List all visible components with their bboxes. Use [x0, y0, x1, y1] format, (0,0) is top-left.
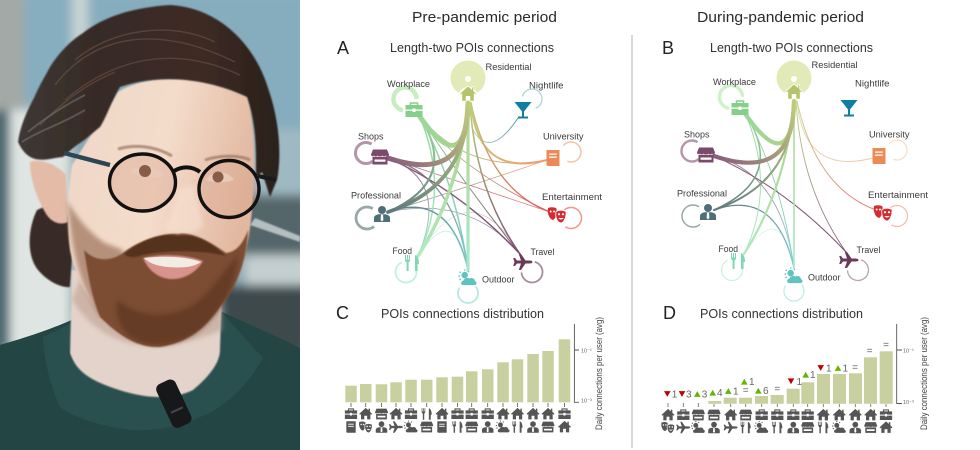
node labels A: Workplace [387, 79, 430, 90]
bar chart C: pre-pandemic distribution [345, 317, 604, 433]
node labels A: Professional [351, 190, 401, 202]
node rings B [677, 60, 912, 305]
panel A title: Length-two POIs connections [390, 41, 554, 55]
node labels A: Shops [358, 132, 384, 142]
node labels A: Nightlife [529, 80, 564, 92]
rank change markers D: = [852, 362, 858, 373]
node rings A [351, 60, 586, 307]
rank change markers D: = [774, 384, 780, 395]
rank change markers D: 1 [842, 364, 848, 374]
node labels A: Entertainment [542, 192, 602, 203]
eyebrows and eyes [118, 146, 250, 160]
cheek stubble [67, 200, 130, 317]
node labels B: Shops [684, 130, 710, 140]
axis C: 10⁻³ [581, 398, 592, 404]
axis D: 10⁻³ [903, 400, 914, 406]
panel letter D: D [663, 303, 676, 323]
rank change markers D: 1 [826, 364, 832, 374]
panel C title: POIs connections distribution [381, 307, 544, 321]
rank change markers D: 1 [810, 370, 816, 381]
node icons B [697, 76, 892, 283]
axis D [897, 324, 914, 406]
rank change markers D: = [867, 346, 873, 357]
panel D title: POIs connections distribution [700, 307, 863, 321]
node labels B: Outdoor [808, 272, 840, 284]
portrait photo of presenter [0, 0, 310, 450]
node labels A: Travel [530, 247, 554, 258]
face [68, 79, 254, 339]
node labels B [677, 60, 928, 284]
axis D: 10⁻¹ [903, 348, 914, 354]
rank change markers D: 6 [763, 386, 769, 397]
rank change markers D: = [883, 340, 889, 351]
bar chart D: during-pandemic distribution [661, 317, 929, 433]
node labels A: Residential [486, 62, 532, 73]
axis title C: Daily connections per user (avg) [594, 317, 604, 430]
heading: during-pandemic period: During-pandemic period [697, 9, 864, 26]
rank change markers D: 1 [796, 377, 802, 388]
top hair [18, 5, 279, 197]
back hair [30, 200, 74, 287]
category icons C [345, 408, 571, 433]
ear [30, 161, 68, 224]
category icons D [661, 409, 892, 433]
panel B title: Length-two POIs connections [710, 41, 873, 55]
beard [84, 230, 248, 347]
node labels B: Professional [677, 188, 727, 200]
panel letter A: A [337, 38, 349, 58]
bar ticks C [351, 403, 564, 407]
node labels B: Residential [812, 60, 858, 71]
rank change markers D: = [743, 386, 749, 397]
sweater [0, 312, 300, 450]
node labels B: Travel [856, 245, 880, 256]
chord network B: during pandemic [677, 60, 928, 305]
axis C [574, 324, 592, 404]
connection curves B [714, 101, 876, 268]
rank change markers D: 1 [733, 386, 739, 398]
node labels B: Workplace [713, 77, 756, 88]
rank change markers D: 4 [717, 388, 723, 399]
node labels B: Entertainment [868, 190, 928, 201]
node labels A [351, 62, 602, 286]
chord network A: pre-pandemic [351, 60, 602, 307]
neck [70, 270, 222, 397]
node labels B: Nightlife [855, 78, 890, 90]
rank change markers D [664, 340, 889, 400]
connection curves A [388, 103, 550, 270]
rank change markers D: 1 [672, 390, 678, 400]
glasses [110, 154, 259, 218]
panel letter B: B [662, 38, 674, 58]
bar ticks D [668, 403, 886, 407]
rank change markers D: 3 [702, 390, 708, 400]
rank change markers D: 3 [686, 390, 692, 400]
axis title D: Daily connections per user (avg) [919, 317, 929, 430]
bars D [708, 351, 893, 404]
heading: pre-pandemic period: Pre-pandemic period [412, 9, 557, 26]
panel divider [631, 35, 633, 448]
microphone [154, 378, 194, 430]
node icons A [371, 76, 566, 285]
axis C: 10⁻¹ [581, 348, 592, 354]
node labels B: University [869, 130, 910, 140]
node labels A: University [543, 132, 584, 142]
panel letter C: C [336, 303, 349, 323]
node labels A: Outdoor [482, 274, 514, 286]
bars C [345, 339, 570, 402]
node labels A: Food [392, 246, 412, 257]
mouth [143, 255, 203, 279]
node labels B: Food [718, 244, 738, 255]
rank change markers D: 1 [749, 377, 755, 388]
